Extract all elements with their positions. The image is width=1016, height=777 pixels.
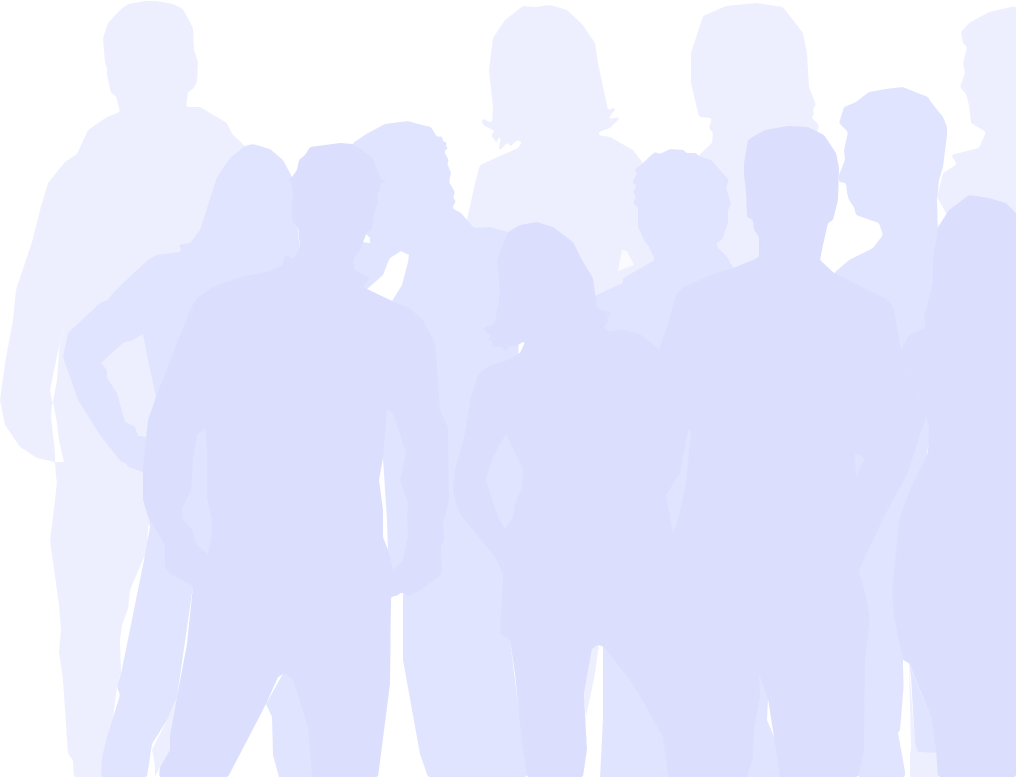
silhouette: front left man bbox=[143, 143, 449, 777]
silhouette: back right woman bbox=[690, 3, 819, 300]
silhouette: left-leg gap figure bbox=[266, 670, 315, 777]
lower leg fragment right bbox=[909, 666, 938, 777]
gap between right man's legs bbox=[747, 674, 780, 777]
silhouette: front right man bbox=[600, 126, 926, 777]
middle row of silhouettes bbox=[63, 87, 947, 777]
gap between woman and right man bbox=[666, 430, 691, 534]
silhouette: middle spiky-hair man bbox=[350, 121, 527, 777]
arm gap of front woman bbox=[486, 434, 523, 529]
silhouette: front far-right woman bbox=[892, 195, 1016, 777]
sliver above white gap at centre legs bbox=[584, 645, 599, 717]
arm gap left of front man bbox=[182, 428, 212, 554]
silhouette: back centre woman bbox=[467, 5, 660, 300]
gap slivers under back figure bbox=[50, 322, 68, 462]
arm gap right of front man bbox=[383, 409, 408, 570]
far-right lower figure bbox=[909, 664, 937, 753]
front row of silhouettes bbox=[143, 126, 1016, 777]
white sliver at far-right legs bbox=[898, 667, 911, 777]
near-white gap between figures bbox=[618, 250, 634, 271]
small triangle gap at right man's hip bbox=[855, 453, 865, 477]
silhouette: middle profile man bbox=[834, 87, 947, 777]
lower leg fragment bbox=[152, 697, 177, 777]
silhouette: middle left woman bbox=[63, 144, 300, 777]
gap beside head: white bbox=[362, 232, 370, 243]
silhouette: front centre woman bbox=[453, 222, 700, 777]
silhouette: back left man bbox=[0, 1, 250, 777]
lower-centre leg bbox=[600, 647, 680, 777]
gap under arm: white bbox=[367, 251, 409, 301]
white gap at centre legs bbox=[583, 645, 603, 777]
back colour arm hole bbox=[101, 334, 156, 437]
silhouette: middle second spiky-hair man bbox=[520, 149, 736, 400]
white sliver in right arm gap bbox=[379, 458, 388, 550]
silhouette: back far-right man bbox=[937, 6, 1016, 300]
white sliver between right man's legs bbox=[767, 699, 774, 737]
